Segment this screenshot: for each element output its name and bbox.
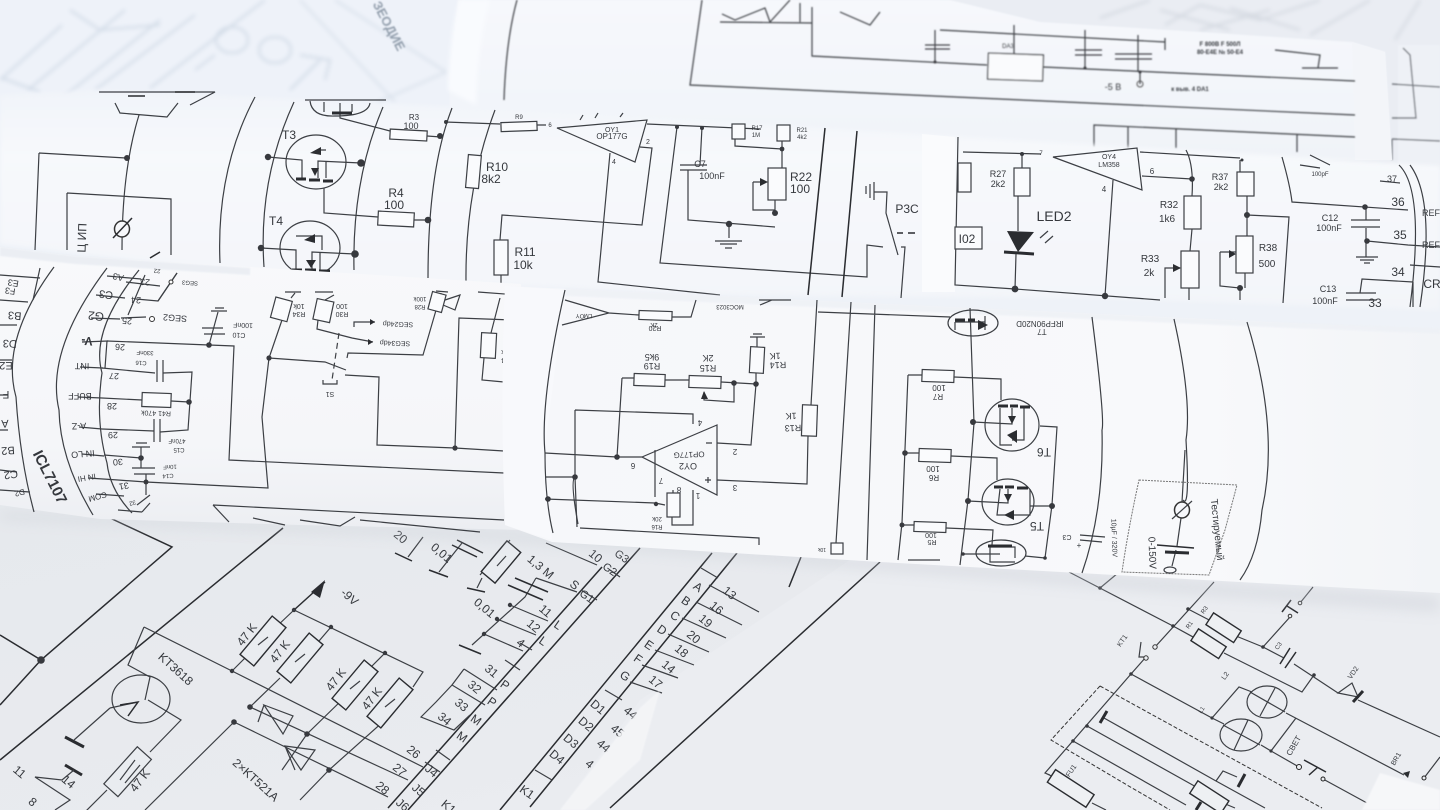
op-amp OY1 OP177G: OP177G — [596, 132, 628, 141]
switch S1 and resistors R34 R30 R28: S1 — [326, 390, 334, 397]
chip labels: B2 — [1, 444, 15, 456]
connector rail A-G with pin numbers: D — [654, 622, 670, 638]
op-amp OY2 OP177G: 8 — [676, 485, 681, 494]
op-amp OY2 OP177G: R16 — [651, 523, 663, 529]
resistors R1 R3: R3 — [1201, 605, 1210, 615]
connector rail A-G with pin numbers: B — [679, 593, 693, 609]
switch S1 and resistors R34 R30 R28 — [266, 291, 518, 451]
chip labels: A3 — [112, 271, 125, 283]
connector rail with pins: 27 — [390, 760, 409, 780]
resistor network 47K — [232, 610, 423, 800]
connector rail A-G with pin numbers: 44 — [594, 736, 613, 756]
soft shadow under front rolls — [0, 512, 1440, 612]
pin numbers: 23 — [140, 277, 150, 287]
op-amp OY4 LM358: OY4 — [1102, 154, 1116, 161]
resistors R1 R3: R1 — [1186, 620, 1195, 630]
capacitors C10 C14 C15 C16, resistor R41 — [102, 308, 504, 512]
resistors R7 R6 R5: R5 — [927, 538, 936, 545]
resistors R3, R4, R10, R11: 10k — [513, 258, 534, 272]
transistor T4 — [258, 214, 359, 275]
resistors R7 R6 R5: R7 — [932, 392, 943, 401]
section with LED2: I02 — [959, 232, 976, 246]
connector rail A-G with pin numbers: E — [642, 637, 656, 653]
transistor T3 — [265, 128, 365, 189]
connector rail with pins: S — [567, 577, 582, 593]
capacitor C3 — [1062, 519, 1118, 558]
chip labels: E3 — [7, 277, 19, 289]
label: ЦИП: Ц ИП — [74, 223, 90, 253]
connector rail A-G with pin numbers: 16 — [707, 598, 726, 618]
capacitors C10 C14 C15 C16, resistor R41: C15 — [173, 446, 185, 452]
resistors R3, R4, R10, R11 — [324, 113, 652, 284]
lighter overlapping sheet — [560, 540, 1440, 810]
lamps L1 L2 — [1131, 671, 1404, 775]
icon: LED diode — [1004, 152, 1053, 292]
voltage arrow -9V: -9V — [338, 586, 361, 608]
pin numbers: 32 — [128, 498, 136, 506]
op-amp OY2 OP177G: 20k — [651, 515, 662, 521]
right section: capacitors C12, C13, pins 34-37: REF — [1422, 208, 1440, 218]
connector rail with pins: 4 — [514, 635, 528, 651]
resistors R32 R33 R37 R38 — [1140, 150, 1289, 303]
resistors R1 R3 — [1186, 605, 1241, 659]
chip labels: IN LO — [71, 448, 95, 460]
chip labels: INT — [74, 361, 89, 371]
left circuit section with indicator — [35, 92, 215, 258]
connector rail A-G with pin numbers: D4 — [547, 747, 568, 768]
resistors R32 R33 R37 R38: R37 — [1212, 172, 1228, 182]
capacitor C3: C3 — [1275, 641, 1284, 651]
capacitors C10 C14 C15 C16, resistor R41: C10 — [232, 331, 246, 338]
connector rail with pins: 26 — [404, 742, 423, 762]
resistors R32 R33 R37 R38: 2k — [1144, 268, 1155, 279]
capacitor C7 and resistors R17 R21 R22: R17 — [751, 126, 763, 132]
pin numbers: 24 — [131, 295, 141, 305]
op-amp OY4 LM358: 6 — [1150, 167, 1155, 176]
blurred text on background sheet: ЗЕОДИЕ — [370, 0, 408, 54]
top paper roll with power supply schematic: F 800В F 500Л — [1200, 42, 1240, 48]
connector rail A-G with pin numbers: 13 — [720, 583, 739, 603]
right section: capacitors C12, C13, pins 34-37: 100nF — [1316, 223, 1342, 233]
op-amp OY1 OP177G: 4 — [612, 159, 616, 166]
connector rail with pins: P — [485, 694, 499, 710]
segment outputs: SEG2 — [163, 312, 187, 324]
top paper roll with power supply schematic — [448, 0, 1392, 160]
transistor T4: T4 — [269, 214, 283, 228]
lower transistor — [961, 540, 1047, 566]
pin numbers: 29 — [108, 430, 118, 440]
central vertical lines and R11: 10k — [817, 546, 826, 552]
feedback resistors R19 R15 R14 R13: 1K — [785, 411, 797, 421]
section with LED2: R27 — [990, 169, 1006, 179]
chip labels: ICL7107 — [29, 448, 70, 507]
capacitors C10 C14 C15 C16, resistor R41: 100nF — [233, 321, 253, 328]
resistors R32 R33 R37 R38: R33 — [1141, 254, 1160, 265]
pin numbers: 28 — [107, 401, 117, 411]
resistor network 47K: 47 K — [323, 666, 349, 694]
resistors R32 R33 R37 R38: 1k6 — [1159, 214, 1175, 225]
diode VD2: VD2 — [1347, 665, 1361, 681]
op-amp OY1 OP177G: OY1 — [605, 127, 619, 134]
transistor T7 IRFP90N20D — [948, 308, 1064, 565]
resistor network 47K: 47 K — [267, 638, 293, 666]
fold glare — [560, 690, 660, 810]
resistor 47K lower left — [10, 747, 153, 810]
feedback resistors R19 R15 R14 R13: R19 — [644, 361, 660, 371]
chip labels: BUFF — [68, 391, 92, 401]
switch KT1: KT1 — [1116, 634, 1129, 648]
verticals and switch P30 — [808, 128, 919, 298]
resistors R7 R6 R5: 100 — [926, 464, 940, 473]
op-amp OY1 OP177G — [548, 113, 720, 295]
resistor network 47K: 47 K — [234, 621, 260, 649]
connector rail A-G with pin numbers: 4 — [583, 756, 597, 772]
feedback resistors R19 R15 R14 R13: 1K — [769, 351, 781, 361]
right section: capacitors C12, C13, pins 34-37: C13 — [1320, 284, 1336, 294]
label: minus five volts: -5 В — [1105, 82, 1121, 92]
connector rail with pins: 34 — [435, 709, 454, 729]
resistors R3, R4, R10, R11: 100 — [384, 198, 404, 212]
capacitors C10 C14 C15 C16, resistor R41: R41 470k — [140, 408, 171, 417]
roll circumference lines — [220, 97, 495, 282]
chip table columns — [0, 267, 177, 515]
connector rail A-G with pin numbers: D3 — [561, 731, 582, 752]
resistor 47K lower left: 14 — [59, 772, 78, 792]
connector rail with pins: 31 — [482, 661, 501, 681]
segment outputs: SEG3 — [181, 278, 198, 286]
chip labels: A-Z — [71, 421, 86, 431]
top paper roll with power supply schematic: DA3 — [1002, 44, 1014, 50]
paper corner — [1362, 773, 1440, 810]
relay box with dashed border — [1045, 674, 1322, 810]
panel: device under test box: Тестируемый — [1208, 498, 1225, 561]
capacitor C3 — [1275, 641, 1296, 668]
connector rail with pins: L — [536, 633, 550, 649]
chip labels: A — [0, 417, 9, 429]
resistors R3, R4, R10, R11: R4 — [388, 186, 404, 200]
op-amp fragment LM — [562, 300, 791, 331]
front-right paper roll with schematic — [502, 286, 1440, 593]
op-amp OY1 OP177G: 6 — [548, 123, 552, 129]
op-amp OY2 OP177G: OY2 — [679, 461, 697, 471]
switch S1 and resistors R34 R30 R28: 3k — [501, 348, 509, 355]
op-amp OY4 LM358: LM358 — [1098, 162, 1120, 169]
capacitor C7 and resistors R17 R21 R22: C7 — [694, 159, 706, 169]
connector rail with pins: G1 — [577, 588, 596, 606]
op-amp fragment LM: МОС3023 — [716, 303, 744, 309]
resistors R3, R4, R10, R11: 8k2 — [481, 172, 501, 186]
op-amp fragment LM: R20 — [648, 324, 661, 331]
connector rail A-G with pin numbers: 17 — [646, 672, 665, 692]
pin numbers: 27 — [109, 371, 119, 381]
capacitors C10 C14 C15 C16, resistor R41: 470nF — [168, 437, 186, 443]
right section: capacitors C12, C13, pins 34-37: REF — [1422, 240, 1440, 250]
pin numbers — [107, 267, 161, 506]
feedback resistors R19 R15 R14 R13: R15 — [700, 363, 716, 373]
right sheet: relay and lamp circuit — [1045, 572, 1440, 810]
transistor T3: T3 — [282, 128, 296, 142]
right section: capacitors C12, C13, pins 34-37: 36 — [1391, 195, 1405, 209]
right section: capacitors C12, C13, pins 34-37 — [1282, 155, 1440, 310]
transistor T7 IRFP90N20D: T7 — [1037, 327, 1047, 336]
capacitors 0,01 and resistor 1,3M: 1,3 M — [525, 552, 557, 582]
resistor 47K lower left: 11 — [10, 763, 29, 782]
transistor T7 IRFP90N20D: IRFP90N20D — [1016, 319, 1064, 328]
pin numbers: 30 — [112, 457, 123, 467]
connector rail A-G with pin numbers: K1 — [517, 782, 537, 802]
switch S1 and resistors R34 R30 R28: R28 — [414, 303, 426, 309]
connector rail with pins: 11 — [536, 602, 555, 621]
capacitor C7 and resistors R17 R21 R22: 100nF — [699, 171, 725, 181]
resistor 47K lower left: 47 K — [127, 767, 153, 795]
resistors R3, R4, R10, R11: R3 — [409, 113, 420, 122]
lamps L1 L2: СВЕТ — [1285, 734, 1303, 757]
main wires — [0, 518, 880, 808]
switch KT1 — [1116, 634, 1157, 676]
connector rail A-G with pin numbers — [500, 553, 759, 810]
panel: device under test box — [1122, 450, 1237, 575]
resistors R7 R6 R5: 100 — [925, 531, 937, 538]
resistors R3, R4, R10, R11: R9 — [515, 115, 523, 121]
capacitors C10 C14 C15 C16, resistor R41: 330nF — [136, 349, 154, 355]
connector rail with pins: 20 — [391, 527, 410, 547]
op-amp fragment LM: OY — [576, 312, 584, 318]
resistor 47K lower left: 8 — [26, 794, 40, 810]
connector rail A-G with pin numbers: D2 — [576, 714, 597, 735]
top paper roll with power supply schematic: к выв. 4 DA1 — [1171, 87, 1209, 93]
transistors T6 T5 — [965, 399, 1057, 558]
op-amp OY4 LM358 — [1039, 148, 1192, 299]
connector rail with pins: M — [454, 728, 470, 746]
connector rail A-G with pin numbers: D1 — [588, 697, 609, 718]
pin numbers: 26 — [115, 342, 125, 352]
op-amp OY4 LM358: 4 — [1102, 185, 1107, 194]
light switch and BR1: BR1 — [1390, 752, 1403, 767]
right section: capacitors C12, C13, pins 34-37: 33 — [1368, 296, 1382, 310]
roll edge lines — [544, 290, 578, 533]
connector rail A-G with pin numbers: 45 — [608, 721, 627, 741]
chip labels: D2 — [13, 487, 26, 498]
switch S1 and resistors R34 R30 R28: R34 — [292, 310, 305, 317]
connector rail with pins: 12 — [524, 616, 543, 636]
capacitors 0,01 and resistor 1,3M: 0,01 — [471, 595, 498, 621]
feedback resistors R19 R15 R14 R13 — [622, 300, 818, 484]
transistors T6 T5: T6 — [1037, 445, 1051, 459]
connector rail with pins: 10 — [586, 546, 605, 566]
chip labels: C3 — [98, 287, 114, 301]
op-amp fragment LM: LM — [584, 312, 592, 318]
feedback resistors R19 R15 R14 R13: 2K — [702, 353, 714, 363]
chip labels: F3 — [4, 285, 16, 297]
relay box with dashed border: FU1 — [1065, 764, 1078, 779]
connector rail with pins: P — [498, 677, 512, 693]
capacitor C3: + — [1077, 541, 1082, 550]
connector rail A-G with pin numbers: C — [667, 608, 683, 624]
feedback resistors R19 R15 R14 R13: 9k5 — [645, 352, 659, 362]
right section: capacitors C12, C13, pins 34-37: C12 — [1322, 213, 1338, 223]
chip labels: G2 — [87, 308, 105, 324]
middle paper roll with schematic — [0, 90, 1440, 310]
resistors R7 R6 R5 — [898, 369, 1001, 560]
chip labels: COM — [87, 490, 108, 503]
central vertical lines and R11 — [580, 302, 950, 560]
resistors R32 R33 R37 R38: 2k2 — [1214, 182, 1228, 192]
resistors R32 R33 R37 R38: R32 — [1160, 200, 1179, 211]
resistors R32 R33 R37 R38: 500 — [1259, 259, 1276, 270]
chip labels: IN HI — [77, 472, 96, 484]
connector rail with pins: M — [468, 711, 484, 729]
op-amp OY2 OP177G: 1 — [695, 491, 700, 500]
segment outputs — [121, 273, 198, 324]
section with LED2: 2k2 — [991, 179, 1005, 189]
chip labels: V- — [81, 334, 93, 348]
op-amp fragment LM: 2K — [650, 321, 658, 327]
right section: capacitors C12, C13, pins 34-37: 100nF — [1312, 296, 1338, 306]
transistor KT3618 — [65, 627, 423, 767]
capacitor C7 and resistors R17 R21 R22: 1M — [752, 133, 760, 139]
switch S1 and resistors R34 R30 R28: SEG24dp — [383, 319, 413, 328]
connector rail with pins: 32 — [465, 677, 484, 697]
switch S1 and resistors R34 R30 R28: R30 — [335, 310, 348, 317]
right section: capacitors C12, C13, pins 34-37: 37 — [1387, 174, 1397, 184]
capacitor C7 and resistors R17 R21 R22: R21 — [796, 128, 808, 134]
lamps L1 L2: L1 — [1198, 705, 1207, 715]
resistors R7 R6 R5: R6 — [928, 473, 939, 482]
transistor KT3618: KT3618 — [155, 650, 196, 689]
capacitor C7 and resistors R17 R21 R22: 4k2 — [797, 135, 807, 141]
resistor network 47K: 47 K — [359, 685, 385, 713]
connector rail A-G with pin numbers: 14 — [659, 657, 678, 677]
capacitor C3: C3 — [1062, 533, 1071, 540]
capacitors C10 C14 C15 C16, resistor R41: C16 — [135, 359, 147, 365]
diodes 2xKT521A: 2×KT521A — [230, 756, 282, 804]
bottom flat schematic sheet — [0, 500, 1440, 810]
pin numbers: 22 — [153, 267, 161, 273]
connector rail with pins: L — [551, 617, 565, 633]
connector rail with pins: 33 — [452, 695, 471, 715]
section with LED2 — [955, 137, 1160, 300]
op-amp OY2 OP177G: 2 — [732, 447, 737, 456]
connector rail with pins: 28 — [373, 778, 392, 798]
connector rail with pins: J5 — [409, 780, 428, 800]
pin numbers: 25 — [122, 316, 132, 326]
switch S1 and resistors R34 R30 R28: 100 — [336, 302, 348, 309]
connector rail with pins: G2 — [600, 561, 619, 579]
op-amp OY2 OP177G: 7 — [658, 476, 663, 485]
connector rail A-G with pin numbers: F — [631, 651, 645, 667]
capacitor C7 and resistors R17 R21 R22: 100 — [790, 182, 810, 196]
resistors R3, R4, R10, R11: R10 — [486, 160, 508, 174]
op-amp OY2 OP177G: 3 — [732, 483, 737, 492]
op-amp OY2 OP177G: 6 — [630, 461, 635, 470]
connector rail A-G with pin numbers: 44 — [621, 703, 640, 723]
right section: capacitors C12, C13, pins 34-37: 100pF — [1311, 172, 1329, 178]
right section: capacitors C12, C13, pins 34-37: 34 — [1391, 265, 1405, 279]
capacitors C10 C14 C15 C16, resistor R41: 10nF — [163, 463, 177, 469]
switch top — [1282, 600, 1302, 618]
verticals and switch P30: P3C — [895, 202, 919, 216]
resistors R32 R33 R37 R38: R38 — [1259, 243, 1278, 254]
op-amp OY4 LM358: 7 — [1039, 151, 1043, 157]
top paper roll with power supply schematic: 80-Е4Е № 50-Е4 — [1197, 49, 1244, 56]
chip labels: B3 — [8, 308, 22, 322]
resistors R7 R6 R5: 100 — [932, 383, 946, 392]
resistors R3, R4, R10, R11: R11 — [514, 245, 536, 259]
connector rail A-G with pin numbers: G — [617, 668, 633, 684]
switch S1 and resistors R34 R30 R28: 10k — [293, 302, 305, 309]
chip labels — [0, 271, 125, 507]
capacitor C7 and resistors R17 R21 R22: R22 — [790, 170, 812, 184]
far-right sheet fragment — [1392, 45, 1440, 170]
diode VD2 — [1338, 665, 1363, 702]
connector rail A-G with pin numbers: 19 — [696, 611, 715, 631]
section with LED2: LED2 — [1036, 208, 1072, 224]
connector rail A-G with pin numbers: A — [691, 579, 705, 595]
chip labels: F — [2, 388, 9, 400]
feedback resistors R19 R15 R14 R13: R14 — [770, 360, 786, 370]
capacitors 0,01 and resistor 1,3M — [395, 537, 597, 654]
panel: device under test box: 0-150V — [1145, 537, 1158, 570]
op-amp OY2 OP177G: 4 — [697, 418, 702, 427]
diodes 2xKT521A — [145, 704, 408, 810]
background sheet: blurred schematic top left — [0, 0, 1440, 200]
connector rail A-G with pin numbers: 20 — [684, 627, 703, 647]
icon: meter — [114, 221, 130, 237]
capacitor C7 and resistors R17 R21 R22 — [647, 124, 883, 277]
switch S1 and resistors R34 R30 R28: SEG34dp — [380, 338, 410, 347]
connector rail with pins — [373, 527, 640, 810]
transistors T6 T5: T5 — [1030, 519, 1044, 533]
voltage arrow -9V — [292, 580, 361, 612]
connector rail A-G with pin numbers: 18 — [672, 641, 691, 661]
capacitor C3: 10µF / 320V — [1109, 519, 1118, 558]
pin numbers: 31 — [118, 480, 130, 492]
top-right blurred background schematic — [940, 0, 1440, 170]
switch S1 and resistors R34 R30 R28: 24 — [501, 356, 509, 363]
op-amp OY2 OP177G — [545, 378, 737, 529]
op-amp OY2 OP177G: OP177G — [673, 449, 705, 460]
chip labels: C2 — [3, 467, 19, 481]
lamps L1 L2: L2 — [1221, 671, 1231, 681]
lower edge wires — [213, 505, 504, 532]
connector rail with pins: J4 — [422, 761, 441, 781]
light switch and BR1 — [1296, 752, 1440, 803]
switch S1 and resistors R34 R30 R28: 100k — [412, 295, 427, 301]
op-amp OY1 OP177G: 2 — [646, 139, 650, 146]
resistors R3, R4, R10, R11: 100 — [403, 121, 419, 131]
feedback resistors R19 R15 R14 R13: R13 — [785, 423, 801, 433]
right section: capacitors C12, C13, pins 34-37: 35 — [1393, 228, 1407, 242]
capacitors C10 C14 C15 C16, resistor R41: C14 — [162, 472, 174, 478]
chip labels: D3 — [3, 337, 17, 349]
capacitors 0,01 and resistor 1,3M: 0,01 — [428, 540, 455, 566]
transistor top fragment — [305, 100, 390, 131]
connector rail with pins: G3 — [612, 548, 631, 566]
front-left paper roll with ICL7107 schematic — [0, 247, 525, 532]
